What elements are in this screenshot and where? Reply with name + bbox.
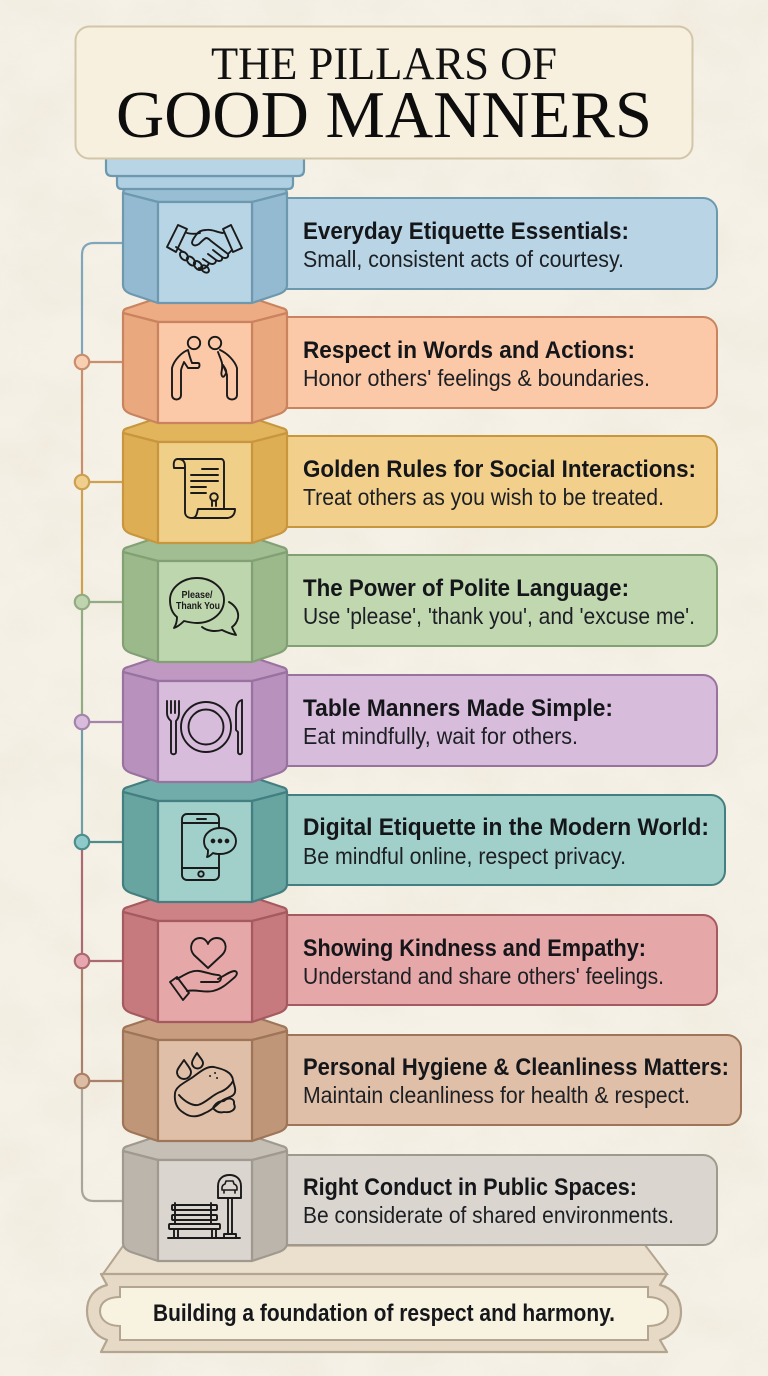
card: public spaces: Right Conduct in Public Spaces:	[303, 1174, 637, 1201]
connector rail with nodes	[75, 243, 123, 1201]
pillar block: respect	[123, 300, 287, 423]
icon: handshake	[167, 225, 242, 274]
card: everyday etiquette: Small, consistent acts of courtesy.	[303, 246, 624, 272]
card: hygiene: Maintain cleanliness for health & respect.	[303, 1082, 690, 1108]
card: digital etiquette: Be mindful online, respect privacy.	[303, 843, 626, 869]
pillar block: hygiene	[123, 1018, 287, 1141]
pillar block: polite language	[123, 539, 287, 662]
card: golden rules: Golden Rules for Social Interactions:	[303, 456, 696, 483]
pillar block: kindness	[123, 899, 287, 1022]
card: digital etiquette	[270, 795, 725, 885]
card: everyday etiquette	[270, 198, 717, 289]
pillar block: table manners	[123, 659, 287, 782]
card: polite language	[270, 555, 717, 646]
icon: speech bubbles: Please/	[182, 589, 213, 601]
icon: phone with chat bubble	[182, 814, 236, 880]
pillar block: public spaces	[123, 1138, 287, 1261]
card: golden rules	[270, 436, 717, 527]
pillar block: digital etiquette	[123, 779, 287, 902]
icon: bench and bus stop	[168, 1175, 241, 1238]
card: table manners: Table Manners Made Simple:	[303, 695, 613, 722]
card: hygiene: Personal Hygiene & Cleanliness Matters:	[303, 1054, 729, 1081]
card: hygiene	[270, 1035, 741, 1125]
card: table manners: Eat mindfully, wait for others.	[303, 723, 578, 749]
card: public spaces: Be considerate of shared environments.	[303, 1202, 674, 1228]
column capital	[106, 150, 304, 189]
pillar block: everyday etiquette	[123, 180, 287, 303]
icon: scroll	[174, 459, 235, 518]
title line 2: GOOD MANNERS	[116, 78, 652, 152]
title line 1: THE PILLARS OF	[211, 38, 557, 90]
plinth caption	[100, 1287, 668, 1340]
card: kindness	[270, 915, 717, 1005]
icon: two people bowing	[172, 337, 237, 400]
pillar block: golden rules	[123, 420, 287, 543]
card: polite language: Use 'please', 'thank you', and 'excuse me'.	[303, 603, 695, 629]
icon: speech bubbles	[170, 578, 238, 635]
icon: fork, plate and knife	[167, 700, 242, 754]
plinth caption: Building a foundation of respect and harmony.	[153, 1300, 615, 1327]
card: polite language: The Power of Polite Language:	[303, 575, 629, 602]
card: digital etiquette: Digital Etiquette in the Modern World:	[303, 814, 709, 841]
card: public spaces	[270, 1155, 717, 1245]
card: respect: Honor others' feelings & boundaries.	[303, 365, 650, 391]
icon: heart in hand	[170, 938, 237, 1000]
card: respect: Respect in Words and Actions:	[303, 337, 635, 364]
plinth base	[87, 1245, 681, 1352]
card: kindness: Showing Kindness and Empathy:	[303, 935, 646, 962]
title panel	[76, 26, 692, 158]
card: golden rules: Treat others as you wish to be treated.	[303, 484, 664, 510]
card: table manners	[270, 675, 717, 766]
icon: speech bubbles: Thank You	[176, 600, 220, 612]
card: kindness: Understand and share others' feelings.	[303, 963, 664, 989]
card: respect	[270, 317, 717, 408]
card: everyday etiquette: Everyday Etiquette Essentials:	[303, 218, 629, 245]
icon: soap and droplets	[175, 1053, 235, 1116]
